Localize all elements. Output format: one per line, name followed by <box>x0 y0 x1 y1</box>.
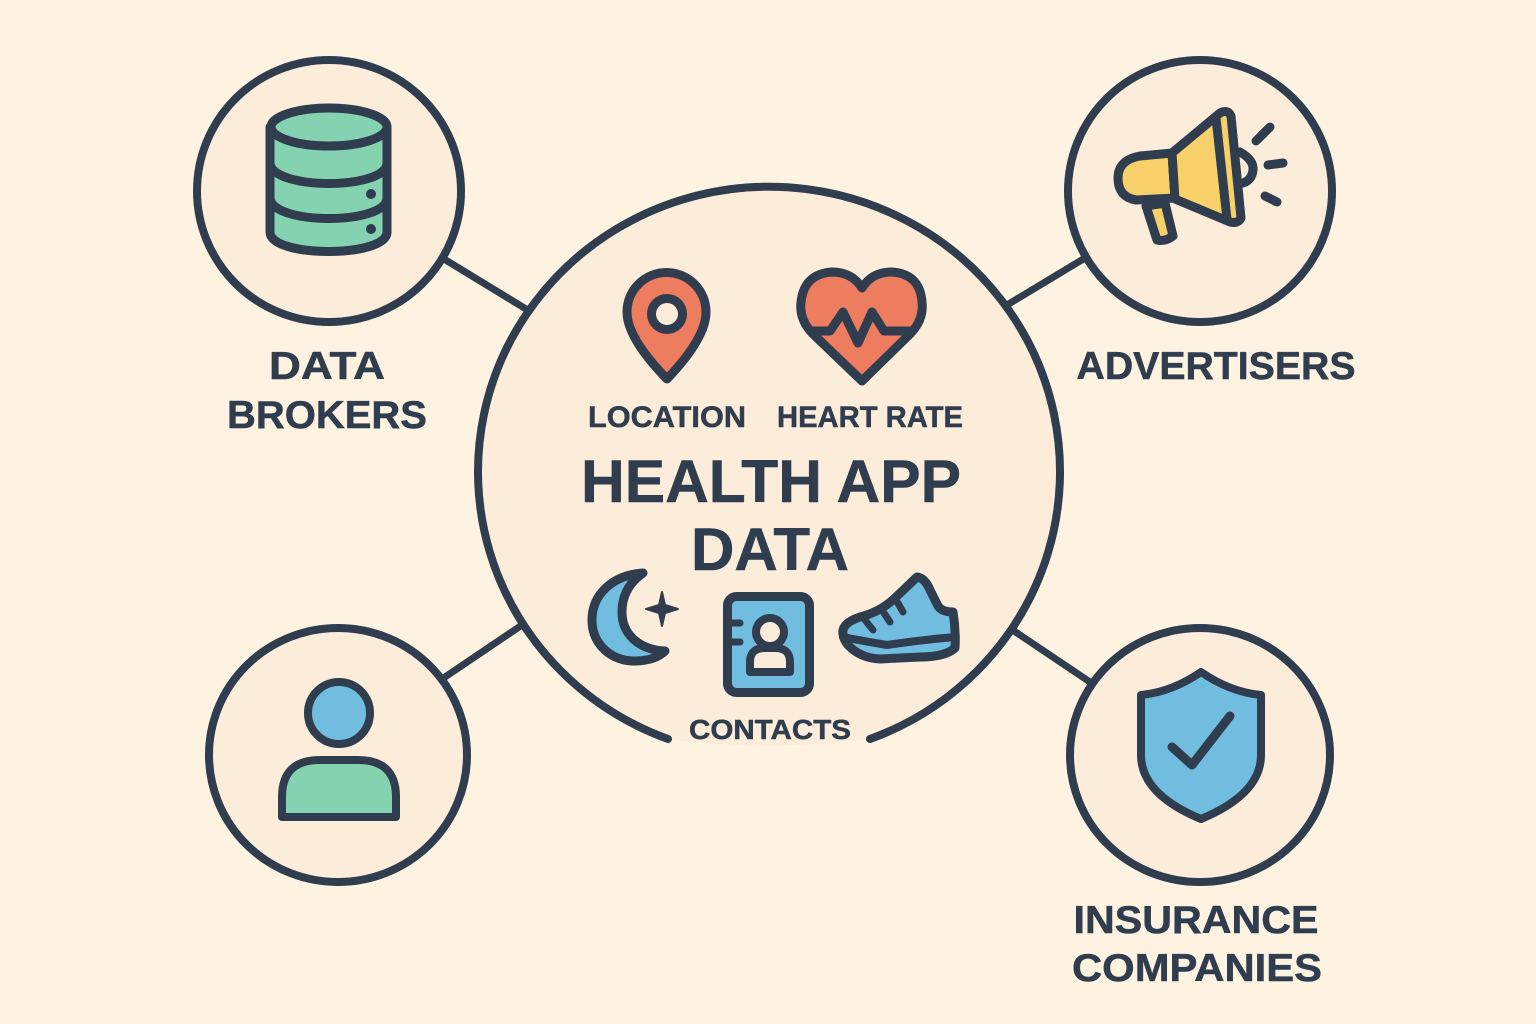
icon: database <box>270 108 387 252</box>
connector: insurance <box>1014 631 1090 682</box>
label: insurance companies: INSURANCE <box>1074 899 1318 942</box>
label: data brokers <box>227 345 427 437</box>
label: data brokers: BROKERS <box>227 394 427 437</box>
icon: sneaker <box>843 577 955 659</box>
connector: advertisers <box>1007 258 1085 305</box>
title: health app data: DATA <box>691 516 849 583</box>
icon: heart rate <box>801 272 922 381</box>
icon: person <box>282 682 396 817</box>
label: insurance companies <box>1072 899 1322 990</box>
label: advertisers: ADVERTISERS <box>1076 345 1356 388</box>
label: contacts: CONTACTS <box>689 714 851 745</box>
icon: contacts book <box>728 596 810 692</box>
satellite circle: person <box>209 628 467 882</box>
satellite circle: insurance <box>1070 628 1330 882</box>
label: location: LOCATION <box>588 401 746 434</box>
title: health app data: HEALTH APP <box>581 448 961 515</box>
icon: shield with check <box>1141 672 1261 819</box>
label: heart rate: HEART RATE <box>777 401 963 434</box>
label: data brokers: DATA <box>269 345 385 388</box>
icon: moon and star <box>592 573 678 661</box>
central circle <box>478 187 1060 745</box>
satellite circle: advertisers <box>1068 60 1332 322</box>
icon: megaphone <box>1118 112 1283 240</box>
satellite circle: data brokers <box>197 60 461 322</box>
label: insurance companies: COMPANIES <box>1072 947 1322 990</box>
title: health app data <box>581 448 961 583</box>
connector: data brokers <box>444 259 526 309</box>
icon: location pin <box>627 273 706 379</box>
connector: person <box>445 625 522 677</box>
